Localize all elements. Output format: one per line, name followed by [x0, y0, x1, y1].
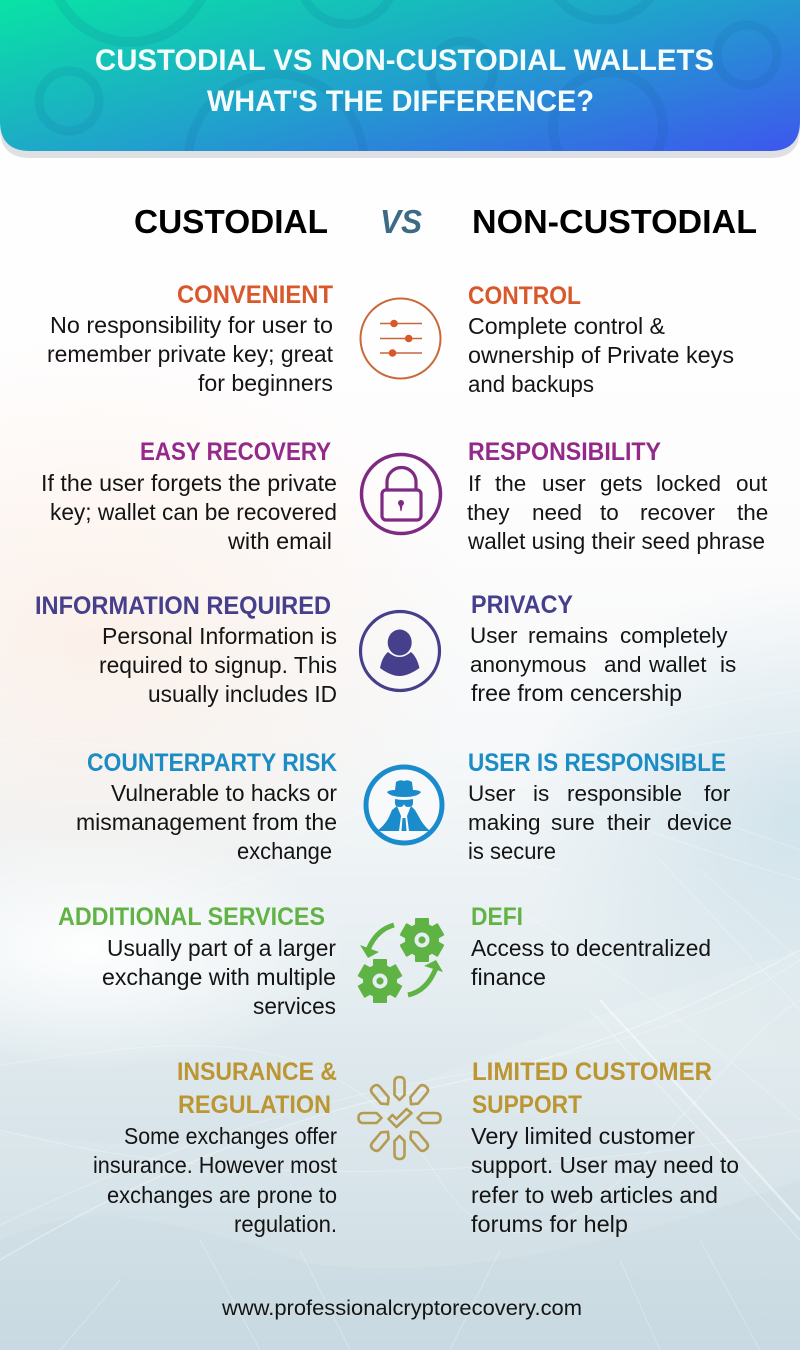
right block: user is responsible: device	[667, 810, 732, 835]
right block: user is responsible: responsible	[567, 781, 682, 806]
left block: easy recovery: with email	[227, 528, 332, 554]
right block: privacy	[470, 591, 736, 706]
left block: additional services: exchange with multiple	[102, 964, 336, 990]
header banner	[0, 0, 800, 158]
right block: user is responsible: is secure	[468, 838, 556, 864]
left block: easy recovery: EASY RECOVERY	[140, 438, 331, 466]
right block: responsibility: need	[532, 500, 582, 525]
right block: limited customer support: support. User may need to	[471, 1152, 739, 1178]
icon: padlock	[362, 454, 440, 534]
right block: privacy: wallet	[648, 652, 707, 677]
left block: counterparty risk: Vulnerable to hacks or	[111, 780, 337, 806]
right block: user is responsible: their	[607, 810, 651, 835]
title: WHAT'S THE DIFFERENCE?	[207, 85, 594, 118]
right block: responsibility	[467, 438, 768, 554]
vs label: VS	[380, 203, 422, 240]
column heading: non-custodial: NON-CUSTODIAL	[472, 203, 757, 240]
right block: responsibility: the	[737, 500, 768, 525]
left block: additional services	[58, 903, 336, 1019]
right block: user is responsible: for	[704, 781, 731, 806]
title	[95, 44, 714, 118]
left block: information required: required to signup. This	[99, 652, 337, 678]
right block: responsibility: the	[495, 471, 526, 496]
left block: additional services: services	[253, 993, 336, 1019]
left block: counterparty risk: exchange	[237, 838, 332, 864]
icon: sliders	[360, 298, 440, 378]
right block: user is responsible: sure	[551, 810, 595, 835]
right block: control: and backups	[468, 371, 594, 397]
left block: counterparty risk: COUNTERPARTY RISK	[87, 749, 337, 777]
right block: limited customer support: SUPPORT	[472, 1091, 582, 1119]
right block: defi: DEFI	[471, 903, 523, 931]
right block: responsibility: RESPONSIBILITY	[468, 438, 661, 466]
right block: responsibility: gets	[600, 471, 643, 496]
right block: responsibility: out	[736, 471, 768, 496]
right block: limited customer support: Very limited customer	[471, 1123, 695, 1149]
right block: responsibility: If	[468, 471, 481, 496]
right block: privacy: anonymous	[470, 652, 586, 677]
column heading: custodial: CUSTODIAL	[134, 203, 328, 240]
title: CUSTODIAL VS NON-CUSTODIAL WALLETS	[95, 44, 714, 77]
left block: insurance and regulation: insurance. However most	[93, 1152, 338, 1178]
right block: limited customer support	[471, 1058, 739, 1237]
right block: user is responsible	[468, 749, 732, 864]
right block: responsibility: to	[600, 500, 619, 525]
right block: responsibility: recover	[640, 500, 716, 525]
right block: control: Complete control &	[468, 313, 665, 339]
left block: counterparty risk: mismanagement from the	[76, 809, 337, 835]
right block: user is responsible: making	[468, 810, 541, 835]
left block: easy recovery: key; wallet can be recovered	[50, 499, 337, 525]
right block: limited customer support: forums for help	[471, 1211, 628, 1237]
right block: user is responsible: User	[468, 781, 516, 806]
right block: privacy: User	[470, 623, 518, 648]
left block: convenient: remember private key; great	[47, 341, 334, 367]
right block: defi: finance	[471, 964, 546, 990]
left block: additional services: Usually part of a larger	[107, 935, 336, 961]
right block: defi: Access to decentralized	[471, 935, 711, 961]
right block: privacy: free from cencership	[471, 680, 682, 706]
left block: information required: Personal Information is	[102, 623, 337, 649]
left block: convenient: CONVENIENT	[177, 281, 333, 309]
right block: responsibility: wallet using their seed phrase	[467, 528, 765, 554]
right block: privacy: remains	[528, 623, 608, 648]
right block: responsibility: they	[467, 500, 510, 525]
right block: control: CONTROL	[468, 282, 581, 310]
left block: insurance and regulation: exchanges are prone to	[107, 1182, 337, 1208]
left block: insurance and regulation: INSURANCE &	[177, 1058, 337, 1086]
icon: gears with arrows	[357, 918, 445, 1003]
left block: convenient: for beginners	[198, 370, 333, 396]
left block: convenient	[47, 281, 334, 396]
left block: information required: usually includes ID	[148, 681, 337, 707]
right block: responsibility: user	[542, 471, 586, 496]
right block: user is responsible: USER IS RESPONSIBLE	[468, 749, 726, 777]
left block: counterparty risk	[76, 749, 337, 864]
right block: limited customer support: LIMITED CUSTOMER	[472, 1058, 712, 1086]
right block: defi	[471, 903, 711, 990]
right block: limited customer support: refer to web articles and	[471, 1182, 718, 1208]
left block: convenient: No responsibility for user to	[50, 312, 333, 338]
left block: information required: INFORMATION REQUIRED	[35, 592, 331, 620]
right block: control	[468, 282, 734, 397]
left block: insurance and regulation: Some exchanges offer	[124, 1123, 337, 1149]
icon: spy	[366, 767, 442, 843]
right block: responsibility: locked	[656, 471, 721, 496]
website url: www.professionalcryptorecovery.com	[221, 1297, 582, 1320]
right block: privacy: completely	[620, 623, 728, 648]
right block: privacy: and	[604, 652, 642, 677]
left block: insurance and regulation: REGULATION	[178, 1091, 331, 1119]
right block: control: ownership of Private keys	[468, 342, 734, 368]
right block: privacy: is	[720, 652, 736, 677]
left block: information required	[35, 592, 337, 707]
left block: easy recovery	[41, 438, 337, 554]
left block: insurance and regulation: regulation.	[234, 1211, 337, 1237]
left block: easy recovery: If the user forgets the private	[41, 470, 337, 496]
icon: person	[360, 612, 440, 690]
left block: additional services: ADDITIONAL SERVICES	[58, 903, 325, 931]
icon: checkmark burst	[358, 1077, 440, 1159]
right block: user is responsible: is	[533, 781, 549, 806]
right block: privacy: PRIVACY	[471, 591, 573, 619]
left block: insurance and regulation	[93, 1058, 338, 1237]
